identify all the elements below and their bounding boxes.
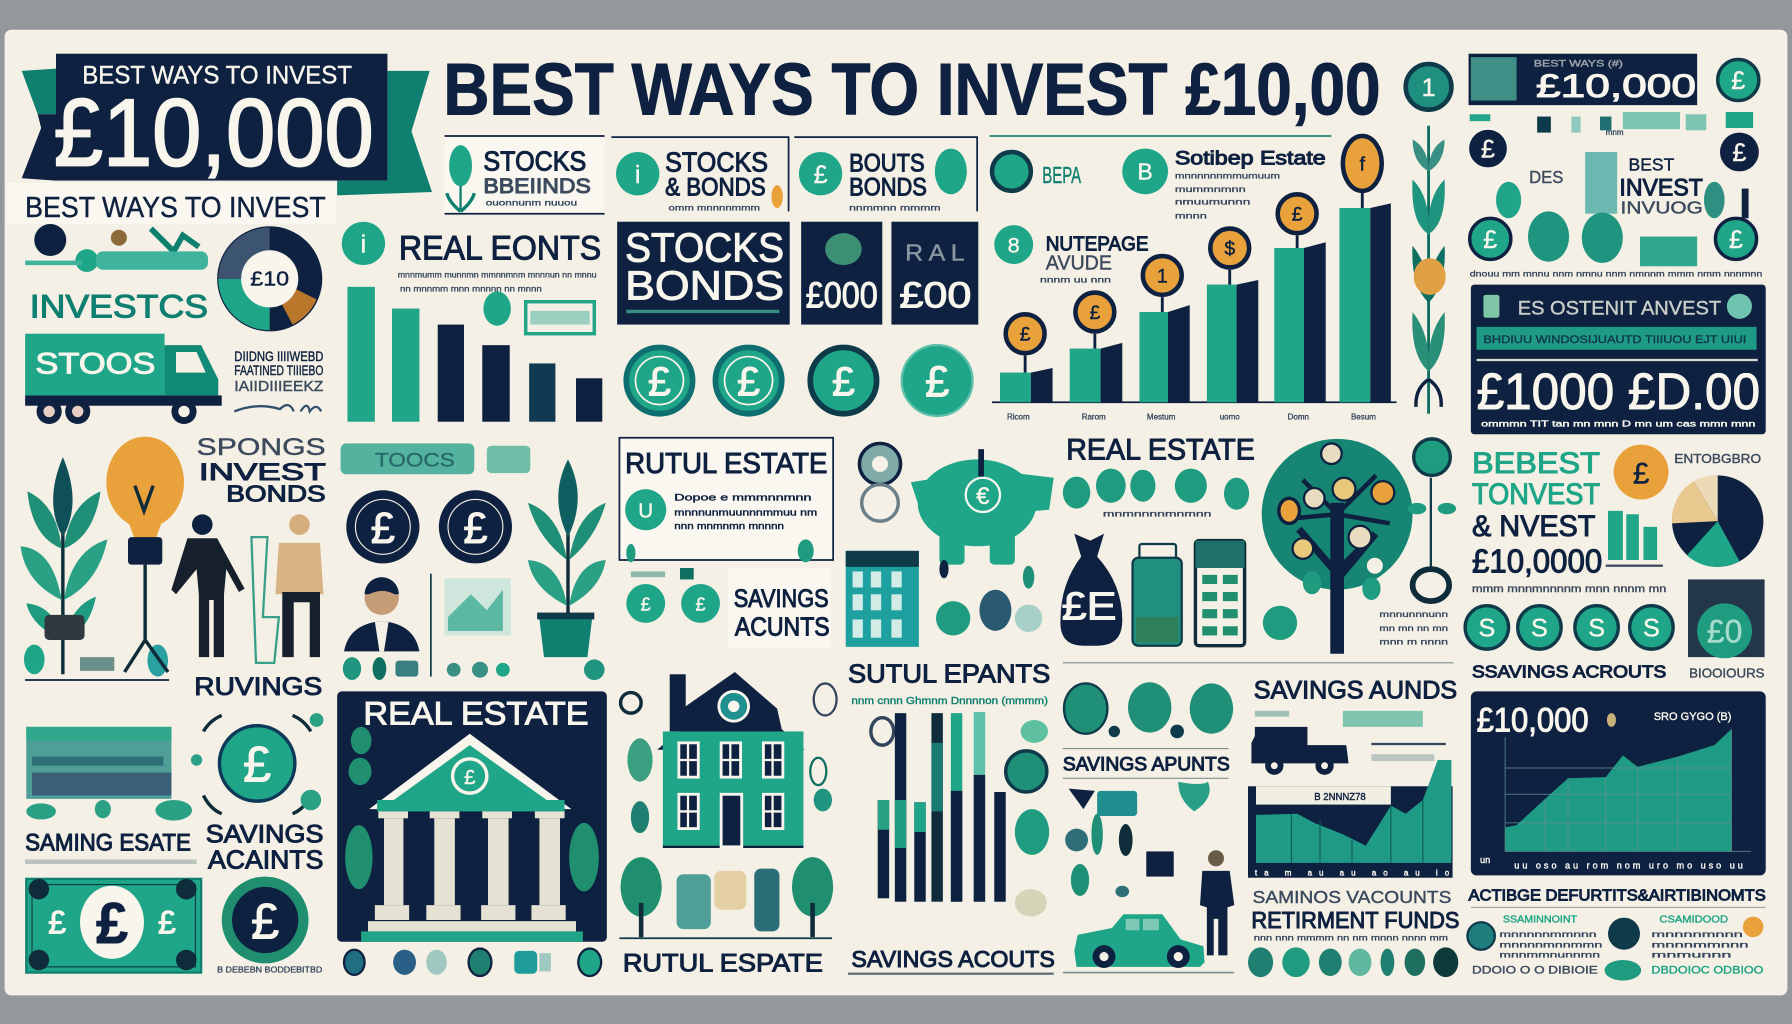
icon: black pickup	[1251, 711, 1446, 775]
panel: top right £10,000 bar: £10,000	[1536, 68, 1696, 104]
text block: truck notes: FAATINED TIIIEBO	[234, 363, 323, 378]
icon row: retirement coins	[1248, 947, 1458, 977]
chart: growing bars with coins: Domn	[1288, 412, 1309, 421]
label: savings apunts: SAVINGS APUNTS	[1063, 753, 1230, 775]
icon: top right coin	[1718, 59, 1759, 101]
main title: BEST WAYS TO INVEST £10,00	[443, 49, 1381, 130]
icon: banknote: £	[48, 905, 66, 941]
chart: navy area £10,000: £10,000	[1477, 701, 1589, 739]
panel: navy real £00 card: £00	[899, 274, 971, 315]
labels: savings acrouts: BIOOIOURS	[1689, 667, 1765, 681]
panel: best tonvest: & NVEST	[1472, 510, 1595, 543]
row: trees and scene	[619, 857, 833, 938]
icon: coin and leaves: mn mn nn mn	[1379, 624, 1448, 633]
panel: savings acunts: £	[641, 593, 651, 614]
panel: invest sketch	[25, 224, 208, 325]
icon: piggy bank: €	[976, 483, 990, 510]
label: rutul espate: RUTUL ESPATE	[623, 949, 823, 977]
panel: estate card: B	[1138, 158, 1153, 184]
chart: growing bars with coins: £	[1089, 302, 1100, 324]
panel: bottom right lists: CSAMIDOOD	[1659, 914, 1728, 925]
panel: real eonts bar chart: REAL EONTS	[399, 229, 601, 267]
panel: navy invest summary: ES OSTENIT ANVEST	[1518, 297, 1721, 319]
coin row: dollars: S	[1588, 615, 1605, 643]
panel: estate card: Sotibep Estate	[1175, 148, 1326, 170]
coin row: dollars: S	[1643, 615, 1660, 643]
panel: estate card: BEPA	[1042, 162, 1082, 188]
card: stocks strip	[341, 443, 530, 474]
icon: left plant	[21, 457, 169, 680]
panel: bottom right lists: mnnmmnunnmn	[1499, 951, 1600, 960]
heading: sutul epants: nnm cnnn Ghmnm Dnnnnon (mmmm)	[851, 696, 1048, 707]
chart: savings area: ta m au au ao au io	[1255, 868, 1450, 877]
panel: best invest coins: £	[1729, 226, 1743, 254]
chart: growing bars with coins: Ricom	[1007, 412, 1030, 421]
top-left banner: £10,000	[54, 80, 374, 187]
panel: stocks card 1: STOCKS	[483, 145, 586, 176]
panel: stocks card 1: BBEIINDS	[483, 173, 591, 198]
panel: best invest coins: £	[1732, 139, 1746, 167]
icon: banknote	[26, 879, 201, 973]
small label: nutepage avude: AVUDE	[1046, 252, 1112, 275]
panel: rutul estate notice: RUTUL ESTATE	[625, 448, 827, 480]
heading: sutul epants: SUTUL EPANTS	[848, 658, 1050, 688]
icon: apartment block	[846, 551, 919, 647]
figure: standing person	[1200, 850, 1234, 955]
icon: teal car	[1063, 914, 1234, 973]
coin row: £	[925, 359, 949, 407]
panel: rutul estate notice: mnnnunmuunnnmmuu nm	[674, 507, 817, 517]
panel: bottom right lists: mnnnnmnnn	[1651, 930, 1743, 939]
panel: bonds card: nnmmnn mmmm	[849, 203, 941, 212]
panel: best invest coins: INVUOG	[1621, 198, 1703, 218]
icon: money bag	[1060, 534, 1122, 646]
picture card	[431, 574, 511, 677]
chart: growing bars with coins	[992, 136, 1397, 421]
icon: banknote: £	[158, 905, 176, 941]
icon cluster: scattered items	[1063, 778, 1229, 897]
text: spongs invest bonds: INVEST	[199, 459, 326, 486]
icon: navy pound seal: £	[251, 892, 279, 949]
panel: bonds card: BOUTS	[849, 149, 925, 177]
panel: estate card	[990, 136, 1331, 220]
chart: savings area	[1248, 760, 1453, 878]
icon: orange coin	[1614, 445, 1669, 499]
chart: donut	[218, 227, 317, 330]
card: navy £20: £0	[1707, 613, 1742, 649]
label: savings acaints: ACAINTS	[208, 845, 323, 875]
panel: stocks bonds navy card: STOCKS	[625, 225, 784, 271]
panel: estate card: mnnn	[1175, 211, 1207, 220]
chart: growing bars with coins: $	[1224, 238, 1235, 260]
text block: truck notes	[234, 349, 324, 411]
panel: estate card: mummnmnn	[1175, 185, 1246, 194]
icon cluster: coins	[936, 560, 1042, 635]
panel: estate card: mnnnnnnmmumuum	[1175, 171, 1280, 180]
labels: savings acrouts: SSAVINGS ACROUTS	[1472, 662, 1666, 682]
panel: savings acunts: £	[695, 593, 706, 614]
chart: growing bars with coins: f	[1360, 153, 1366, 175]
chart: navy area £10,000	[1471, 691, 1766, 875]
panel: navy real £00 card: R A L	[905, 240, 965, 266]
panel: top right £10,000 bar: BEST WAYS (#)	[1534, 58, 1623, 68]
panel: stocks card 2: omm mnnnnmmm	[669, 203, 760, 212]
top-left banner	[22, 54, 432, 195]
panel: best invest coins: INVEST	[1619, 174, 1703, 201]
coin row	[626, 345, 973, 416]
text block: truck notes: DIIDNG IIIIWEBD	[234, 349, 324, 364]
icon: banknote: £	[96, 892, 128, 956]
panel: stocks bonds navy card	[617, 222, 790, 325]
icon: navy pound seal: B DEBEBN BODDEBITBD	[217, 966, 323, 975]
chart: growing bars with coins: £	[1020, 324, 1031, 346]
panel: bottom right lists: mnnnnnmmnnn	[1499, 930, 1597, 939]
panel: best invest coins	[1469, 129, 1762, 279]
top-left banner: BEST WAYS TO INVEST	[82, 61, 352, 89]
icon: truck: STOOS	[35, 348, 155, 381]
panel: stocks card 2: STOCKS	[665, 146, 768, 177]
chart: navy area £10,000: SRO GYGO (B)	[1654, 711, 1732, 723]
panel: best tonvest: mmm mnnmnnnnm mnn nnnm mn	[1472, 584, 1667, 595]
coin row: £	[737, 358, 760, 404]
icon: navy pound seal	[217, 877, 323, 975]
panel: navy £000 card	[801, 222, 882, 325]
coin pair: £	[463, 505, 487, 553]
icon: potted plant	[528, 459, 606, 657]
icons beside bars	[1006, 720, 1049, 917]
panel: stocks card 2: i	[635, 161, 641, 189]
icon: house	[657, 672, 805, 848]
text: spongs invest bonds: SPONGS	[197, 434, 326, 461]
panel: stocks card 2	[611, 137, 789, 212]
label: savings vacounts: SAMINOS VACOUNTS	[1253, 887, 1451, 907]
coin pair: £	[371, 505, 395, 553]
panel: best tonvest: £10,0000	[1472, 544, 1602, 581]
heading: ruvings: RUVINGS	[194, 673, 322, 701]
panel: bottom right lists: mnnnmmnnn	[1651, 940, 1749, 949]
chart: navy area £10,000: un	[1480, 855, 1490, 865]
panel: navy invest summary: £1000 £D.00	[1477, 362, 1760, 420]
chart: navy area £10,000: uu oso au rom nom uro mo uso uu	[1514, 861, 1743, 871]
icon: truck	[25, 334, 222, 424]
panel: real eonts bar chart: nn mnnmm mnn mnnnn nn mnnn	[400, 284, 542, 293]
icon: jar	[1133, 544, 1182, 646]
coin pair	[346, 490, 512, 563]
panel: bottom right lists: mnnnnmnnmmn	[1499, 940, 1602, 949]
icon: orange coin: £	[1633, 457, 1650, 490]
panel: bottom right lists: SSAMINNOINT	[1503, 914, 1578, 925]
chart: pie: ENTOBGBRO	[1674, 452, 1761, 466]
icon: lightbulb	[106, 437, 184, 672]
small label: nutepage avude: nnnm uu nnn	[1040, 275, 1111, 284]
chart: donut: £10	[250, 268, 289, 291]
panel: real eonts bar chart	[342, 222, 602, 422]
coin row: dollars	[1465, 606, 1673, 649]
icon: eye	[859, 443, 901, 521]
panel: rutul estate notice	[619, 438, 833, 562]
icon: growing plant column: 1	[1422, 74, 1436, 102]
icon: teal pound coin: £	[243, 736, 271, 793]
small label: nutepage avude: 8	[1008, 233, 1020, 258]
figure: person tan	[251, 514, 323, 663]
panel: rutul estate notice: nnn mnmnmn mnnnn	[674, 521, 784, 531]
panel: real eonts bar chart: i	[361, 231, 366, 259]
chart: tall bars	[871, 712, 1006, 902]
icon: coin and leaves: mnn m nnnn	[1379, 638, 1448, 647]
heading: real estate: REAL ESTATE	[1066, 433, 1255, 466]
coin row: dollars: S	[1531, 615, 1548, 643]
heading: savings aunds: SAVINGS AUNDS	[1254, 676, 1457, 704]
coin row: £	[648, 358, 671, 404]
panel: navy invest summary	[1471, 285, 1766, 434]
panel: navy invest summary: ommmn TIT tan mn mnn D mn um cas mmn mnn	[1481, 419, 1755, 428]
coin row: £	[832, 358, 855, 404]
panel: best tonvest: BEBEST	[1472, 447, 1600, 480]
icon: money tree	[1262, 439, 1413, 654]
panel: best invest coins: DES	[1529, 167, 1563, 187]
panel: best invest coins: £	[1481, 136, 1495, 164]
panel: bottom right lists: mnmunnn	[1651, 951, 1731, 960]
panel: best tonvest	[1472, 447, 1667, 595]
panel: bottom right lists: DBDOIOC ODBIOO	[1651, 965, 1764, 977]
chart: growing bars with coins: £	[1292, 204, 1303, 226]
icon: top right coin: £	[1731, 67, 1745, 95]
panel: best invest coins: BEST	[1629, 154, 1675, 174]
left heading: BEST WAYS TO INVEST	[25, 192, 326, 224]
small label: nutepage avude: NUTEPAGE	[1046, 232, 1149, 255]
panel: stocks card 1: ouonnunm nuuou	[486, 199, 577, 208]
panel: stocks bonds navy card: BONDS	[625, 262, 784, 308]
heading: sutul epants	[848, 658, 1050, 707]
panel: savings acunts: SAVINGS	[734, 585, 829, 613]
icon: coin and leaves	[1379, 439, 1456, 647]
small label: nutepage avude	[994, 225, 1149, 284]
card: stocks strip: TOOCS	[375, 449, 455, 471]
house side icons	[621, 683, 837, 833]
panel: top right £10,000 bar	[1469, 54, 1697, 105]
text block: truck notes: IAIIDIIIEEKZ	[234, 379, 323, 395]
chart: growing bars with coins: uomo	[1220, 412, 1240, 421]
panel: bonds card	[794, 137, 977, 212]
chart: mini bars	[1606, 511, 1663, 567]
panel: savings acunts: ACUNTS	[735, 611, 830, 641]
panel: navy £000 card: £000	[806, 274, 878, 315]
decorative icon strip: mnm	[1606, 128, 1624, 137]
panel: rutul estate notice: Dopoe e mmmnnmnn	[674, 493, 811, 503]
card: navy £20	[1688, 579, 1765, 658]
text: spongs invest bonds	[197, 434, 326, 507]
figure: person navy	[171, 514, 245, 657]
panel: best invest coins: £	[1483, 226, 1497, 254]
icon row: estate coins	[1063, 469, 1249, 519]
icon row under temple	[344, 949, 601, 976]
label: savings acaints	[206, 820, 323, 875]
chart: growing bars with coins: Rarom	[1082, 412, 1106, 421]
icon: money bag: £E	[1062, 585, 1117, 628]
label: retirement funds: RETIRMENT FUNDS	[1251, 907, 1459, 933]
icon row: estate coins: mnmnnnnmnmnn	[1103, 510, 1211, 519]
panel: plaque	[26, 727, 192, 821]
panel: bonds card: BONDS	[849, 173, 927, 201]
label: savings acouts: SAVINGS ACOUTS	[851, 946, 1055, 972]
panel: invest sketch: INVESTCS	[30, 289, 208, 325]
labels: savings acrouts	[1472, 662, 1765, 682]
panel: savings apunts icons	[1063, 663, 1454, 749]
chart: growing bars with coins: Besum	[1351, 412, 1376, 421]
panel: navy invest summary: BHDIUU WINDOSIJUAUTD TIIIUOU EJT UIUI	[1483, 334, 1746, 346]
icon: piggy bank	[911, 449, 1054, 565]
label: saming esate: SAMING ESATE	[25, 829, 191, 856]
chart: growing bars with coins: Mestum	[1147, 412, 1176, 421]
panel: estate card: nmuumunnn	[1175, 198, 1250, 207]
panel: best tonvest: TONVEST	[1472, 478, 1600, 511]
text: spongs invest bonds: BONDS	[226, 481, 326, 507]
chart: savings area: B 2NNNZ78	[1314, 792, 1366, 803]
icon row	[343, 657, 605, 680]
icon: growing plant column	[1406, 64, 1451, 414]
panel: bonds card: £	[814, 161, 828, 189]
panel: bottom right lists: DDOIO O O DIBIOIE	[1472, 965, 1598, 977]
heading: retirement notes: ACTIBGE DEFURTITS&AIRTIBINOMTS	[1469, 888, 1766, 905]
panel: real estate temple: £	[464, 766, 476, 789]
panel: bottom right lists	[1467, 914, 1764, 981]
icon: teal pound coin	[191, 713, 323, 814]
panel: navy real £00 card	[891, 222, 978, 325]
panel: stocks card 2: & BONDS	[665, 173, 766, 201]
panel: best invest coins: dnouu mm mnnu nnm nmnu nnm nmnnm mmm nmm nnnmnn	[1470, 270, 1762, 279]
panel: rutul estate notice: U	[638, 500, 653, 523]
icon: calculator	[1195, 541, 1245, 646]
panel: real estate temple: REAL ESTATE	[363, 696, 589, 732]
chart: pie	[1672, 452, 1763, 567]
chart: growing bars with coins: 1	[1157, 265, 1168, 287]
panel: savings acunts	[626, 568, 831, 648]
figure: businessman	[344, 577, 419, 651]
panel: real estate temple	[337, 691, 607, 942]
panel: stocks card 1	[445, 136, 605, 214]
label: retirement funds: nnn nnn mmmm nn nm mnnn nnnn mm	[1254, 934, 1448, 943]
panel: real eonts bar chart: mnnmumm munnmn mmnnmnm mnnnun nn mnnu	[398, 271, 597, 280]
icon: coin and leaves: mnnunnnunn	[1379, 610, 1448, 619]
label: savings acaints: SAVINGS	[206, 820, 323, 848]
coin row: dollars: S	[1478, 615, 1495, 643]
decorative icon strip	[1470, 112, 1753, 137]
